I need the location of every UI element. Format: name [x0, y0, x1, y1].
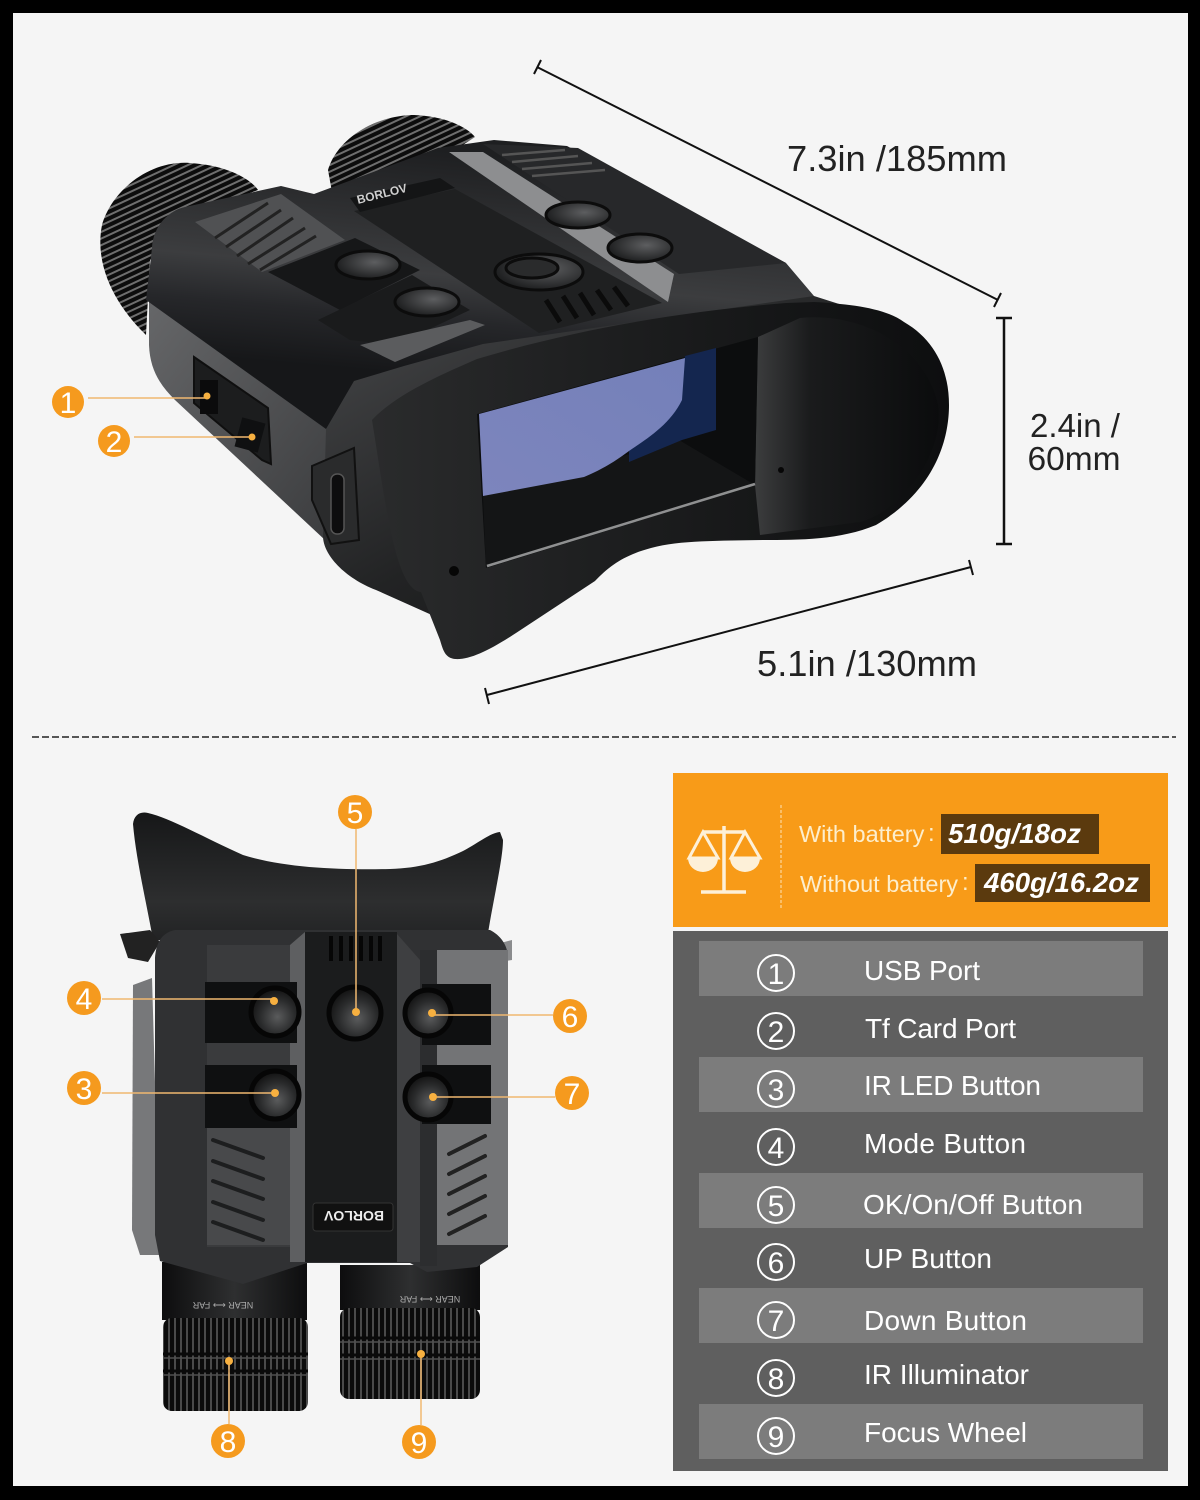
callout 7: [429, 1076, 589, 1111]
silver strip: [449, 152, 674, 302]
bottom vents: [546, 287, 628, 322]
side port cover: [194, 357, 271, 464]
central column: [305, 932, 397, 1262]
knurled wheel left: [163, 1318, 308, 1411]
list row 1: USB Port: [864, 955, 980, 986]
right bevel: [397, 934, 420, 1262]
list row 3: IR LED Button: [864, 1070, 1041, 1101]
right top panel: [483, 144, 786, 274]
callout 3: 3: [76, 1073, 92, 1106]
logo plate: [350, 178, 455, 212]
dimension: length: 7.3in /185mm: [787, 138, 1007, 179]
dimension: height: 60mm: [1027, 441, 1121, 478]
right panel light area: [437, 950, 508, 1245]
list row 3: 3: [768, 1074, 784, 1107]
side panel: [132, 978, 160, 1255]
weight with battery: :: [928, 820, 935, 847]
lens tube right: [340, 1265, 480, 1310]
logo: [313, 1203, 393, 1231]
weight without battery: :: [962, 869, 969, 896]
callout 4: 4: [76, 983, 92, 1016]
right middle panel: [420, 950, 437, 1266]
body: [155, 930, 508, 1284]
list row 4: [758, 1128, 1026, 1165]
callout 5: 5: [347, 797, 363, 830]
list row 7: 7: [768, 1305, 784, 1338]
buttons: [251, 987, 451, 1120]
front knurled wheel: [100, 163, 258, 335]
central plate: [354, 189, 662, 333]
list row 6: 6: [768, 1247, 784, 1280]
side clips: [120, 930, 512, 962]
dimension: height: [996, 318, 1121, 544]
callout 8: [211, 1357, 245, 1459]
list row 7: Down Button: [864, 1305, 1027, 1336]
weight without battery: Without battery: [800, 871, 958, 897]
dimension: height: 2.4in /: [1030, 407, 1121, 444]
recess floor: [483, 440, 755, 568]
callout 2: [98, 425, 256, 459]
list row 5: [758, 1187, 1083, 1223]
callout 1: [52, 386, 210, 420]
callout 7: 7: [564, 1078, 580, 1111]
list row 1: [758, 955, 980, 991]
button recesses: [205, 982, 491, 1128]
weight without battery: 460g/16.2oz: [983, 867, 1139, 898]
dimension: width: 5.1in /130mm: [757, 643, 977, 684]
callout 1: 1: [60, 387, 76, 420]
left button recesses: [268, 238, 485, 362]
knurled wheel right: [340, 1308, 480, 1399]
logo plate: BORLOV: [355, 181, 409, 207]
left bevel: [290, 932, 305, 1262]
callout 6: 6: [562, 1001, 578, 1034]
callout 9: 9: [411, 1427, 427, 1460]
screen recess: [477, 337, 758, 568]
screen: [479, 358, 685, 496]
lower side panel: [149, 285, 345, 540]
weight with battery: 510g/18oz: [948, 818, 1081, 849]
callout 9: [402, 1350, 436, 1460]
list row 9: Focus Wheel: [864, 1417, 1027, 1448]
side clip: [312, 448, 359, 544]
panel: parts list: [673, 931, 1168, 1471]
list row 5: 5: [768, 1190, 784, 1223]
weight with battery: With battery: [799, 821, 925, 847]
eyecup screws: [449, 467, 784, 576]
eyecup inner right wall: [755, 317, 939, 535]
list row 4: 4: [768, 1132, 784, 1165]
list row 9: 9: [768, 1421, 784, 1454]
panel: weight: [673, 773, 1168, 927]
recess edge: [487, 484, 755, 566]
rear knurled wheel: [328, 115, 475, 195]
vents: [213, 936, 485, 1240]
upper body: [146, 140, 814, 429]
top buttons: [336, 202, 672, 316]
lens tube left: NEAR ⟷ FAR: [192, 1300, 253, 1310]
weight with battery: [799, 814, 1099, 854]
logo: BORLOV: [323, 1208, 384, 1224]
lens tube left: [162, 1262, 307, 1320]
right vents: [502, 150, 605, 176]
left lower panel: [207, 1125, 290, 1245]
weight without battery: [800, 864, 1150, 902]
list row 2: [758, 1013, 1016, 1049]
list row 6: UP Button: [864, 1243, 992, 1274]
left pad with vents: [195, 194, 345, 272]
list row 9: [758, 1417, 1027, 1454]
list row 4: Mode Button: [864, 1128, 1026, 1159]
callout 6: [428, 999, 587, 1034]
callout 2: 2: [106, 426, 122, 459]
list row 5: OK/On/Off Button: [863, 1189, 1083, 1220]
list row 6: [758, 1243, 992, 1280]
product photo: top view of binoculars: [100, 115, 949, 659]
eyecup: [372, 302, 949, 659]
dimension: length: [534, 60, 1007, 307]
list row 8: IR Illuminator: [864, 1359, 1029, 1390]
list row 7: [758, 1302, 1027, 1338]
callout 8: 8: [220, 1426, 236, 1459]
front housing: [323, 296, 905, 620]
list row 2: 2: [768, 1016, 784, 1049]
left panel light area: [207, 945, 290, 1247]
list row 8: [758, 1359, 1029, 1396]
list row 2: Tf Card Port: [865, 1013, 1016, 1044]
lens tube right: NEAR ⟷ FAR: [399, 1294, 460, 1304]
list row 1: 1: [768, 958, 784, 991]
dimension: width: [485, 560, 977, 704]
product photo: rear view of binoculars: [120, 812, 512, 1411]
icon: balance scale: [688, 826, 760, 892]
eyecup: [133, 812, 503, 940]
list row 3: [758, 1070, 1041, 1107]
screen glass edge: [629, 348, 716, 462]
callout 4: [67, 981, 278, 1016]
list row 8: 8: [768, 1363, 784, 1396]
callout 5: [338, 795, 372, 1016]
callout 3: [67, 1071, 279, 1106]
